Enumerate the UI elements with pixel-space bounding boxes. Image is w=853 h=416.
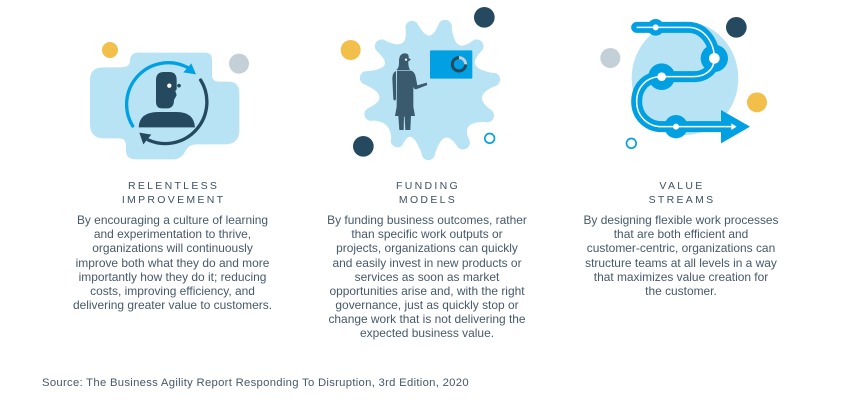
icon: funding models [341, 7, 499, 159]
text: relentless improvement: organizations will continuously [92, 241, 253, 255]
dark arrow arc [139, 80, 207, 144]
presenter figure [392, 53, 427, 130]
blue arrow arc [127, 63, 196, 126]
text: relentless improvement: By encouraging a culture of learning [77, 213, 268, 227]
star blob background [361, 21, 499, 159]
yellow dot [102, 42, 118, 58]
heading: value streams: VALUE [659, 180, 705, 192]
heading: relentless improvement: IMPROVEMENT [122, 194, 225, 206]
icon: relentless improvement [90, 42, 249, 159]
blob background [90, 53, 239, 159]
text: funding models: By funding business outcomes, rather [327, 213, 527, 227]
text: value streams: that maximizes value creation for [594, 270, 768, 284]
heading: funding models [396, 180, 460, 206]
presentation screen [430, 50, 472, 79]
text: funding models: expected business value. [360, 326, 494, 340]
ring [485, 133, 494, 143]
dark dot top [474, 7, 495, 28]
heading: relentless improvement [122, 180, 225, 206]
circle background [632, 22, 738, 135]
person head and shoulders [139, 72, 195, 127]
text: relentless improvement: improve both what they do and more [76, 256, 269, 270]
text: funding models: services as soon as market [355, 270, 499, 284]
text: relentless improvement: and experimentation to thrive, [94, 227, 251, 241]
text: funding models: than specific work outputs or [351, 227, 503, 241]
text: value streams: structure teams at all levels in a way [585, 256, 777, 270]
dark dot [726, 17, 747, 38]
text: funding models: change work that is not delivering the [328, 312, 526, 326]
text: funding models: opportunities arise and, with the right [329, 284, 525, 298]
text: value streams: customer-centric, organizations can [587, 241, 775, 255]
text: funding models: and easily invest in new products or [332, 256, 522, 270]
text: relentless improvement: delivering greater value to customers. [73, 298, 272, 312]
text: relentless improvement: costs, improving efficiency, and [90, 284, 255, 298]
heading: value streams: STREAMS [649, 194, 715, 206]
icon: value streams [600, 17, 767, 148]
heading: relentless improvement: RELENTLESS [128, 180, 219, 192]
text: value streams: the customer. [645, 284, 717, 298]
heading: funding models: MODELS [399, 194, 457, 206]
text: value streams: that are both efficient and [614, 227, 748, 241]
heading: funding models: FUNDING [396, 180, 460, 192]
grey dot [229, 54, 249, 74]
source note: Source: The Business Agility Report Responding To Disruption, 3rd Edition, 2020 [42, 376, 469, 388]
heading: value streams [649, 180, 715, 206]
text: funding models [327, 213, 527, 340]
text: funding models: projects, organizations can quickly [336, 241, 518, 255]
grey dot [600, 48, 620, 68]
ring [626, 138, 636, 148]
yellow dot [747, 92, 767, 112]
text: relentless improvement: importantly how they do it; reducing [79, 270, 266, 284]
text: value streams [583, 213, 779, 298]
text: funding models: governance, just as quickly stop or [335, 298, 519, 312]
stream path [637, 19, 750, 143]
text: relentless improvement [73, 213, 272, 312]
dark dot bottom [353, 136, 374, 157]
text: value streams: By designing flexible work processes [583, 213, 779, 227]
yellow dot [341, 40, 361, 60]
